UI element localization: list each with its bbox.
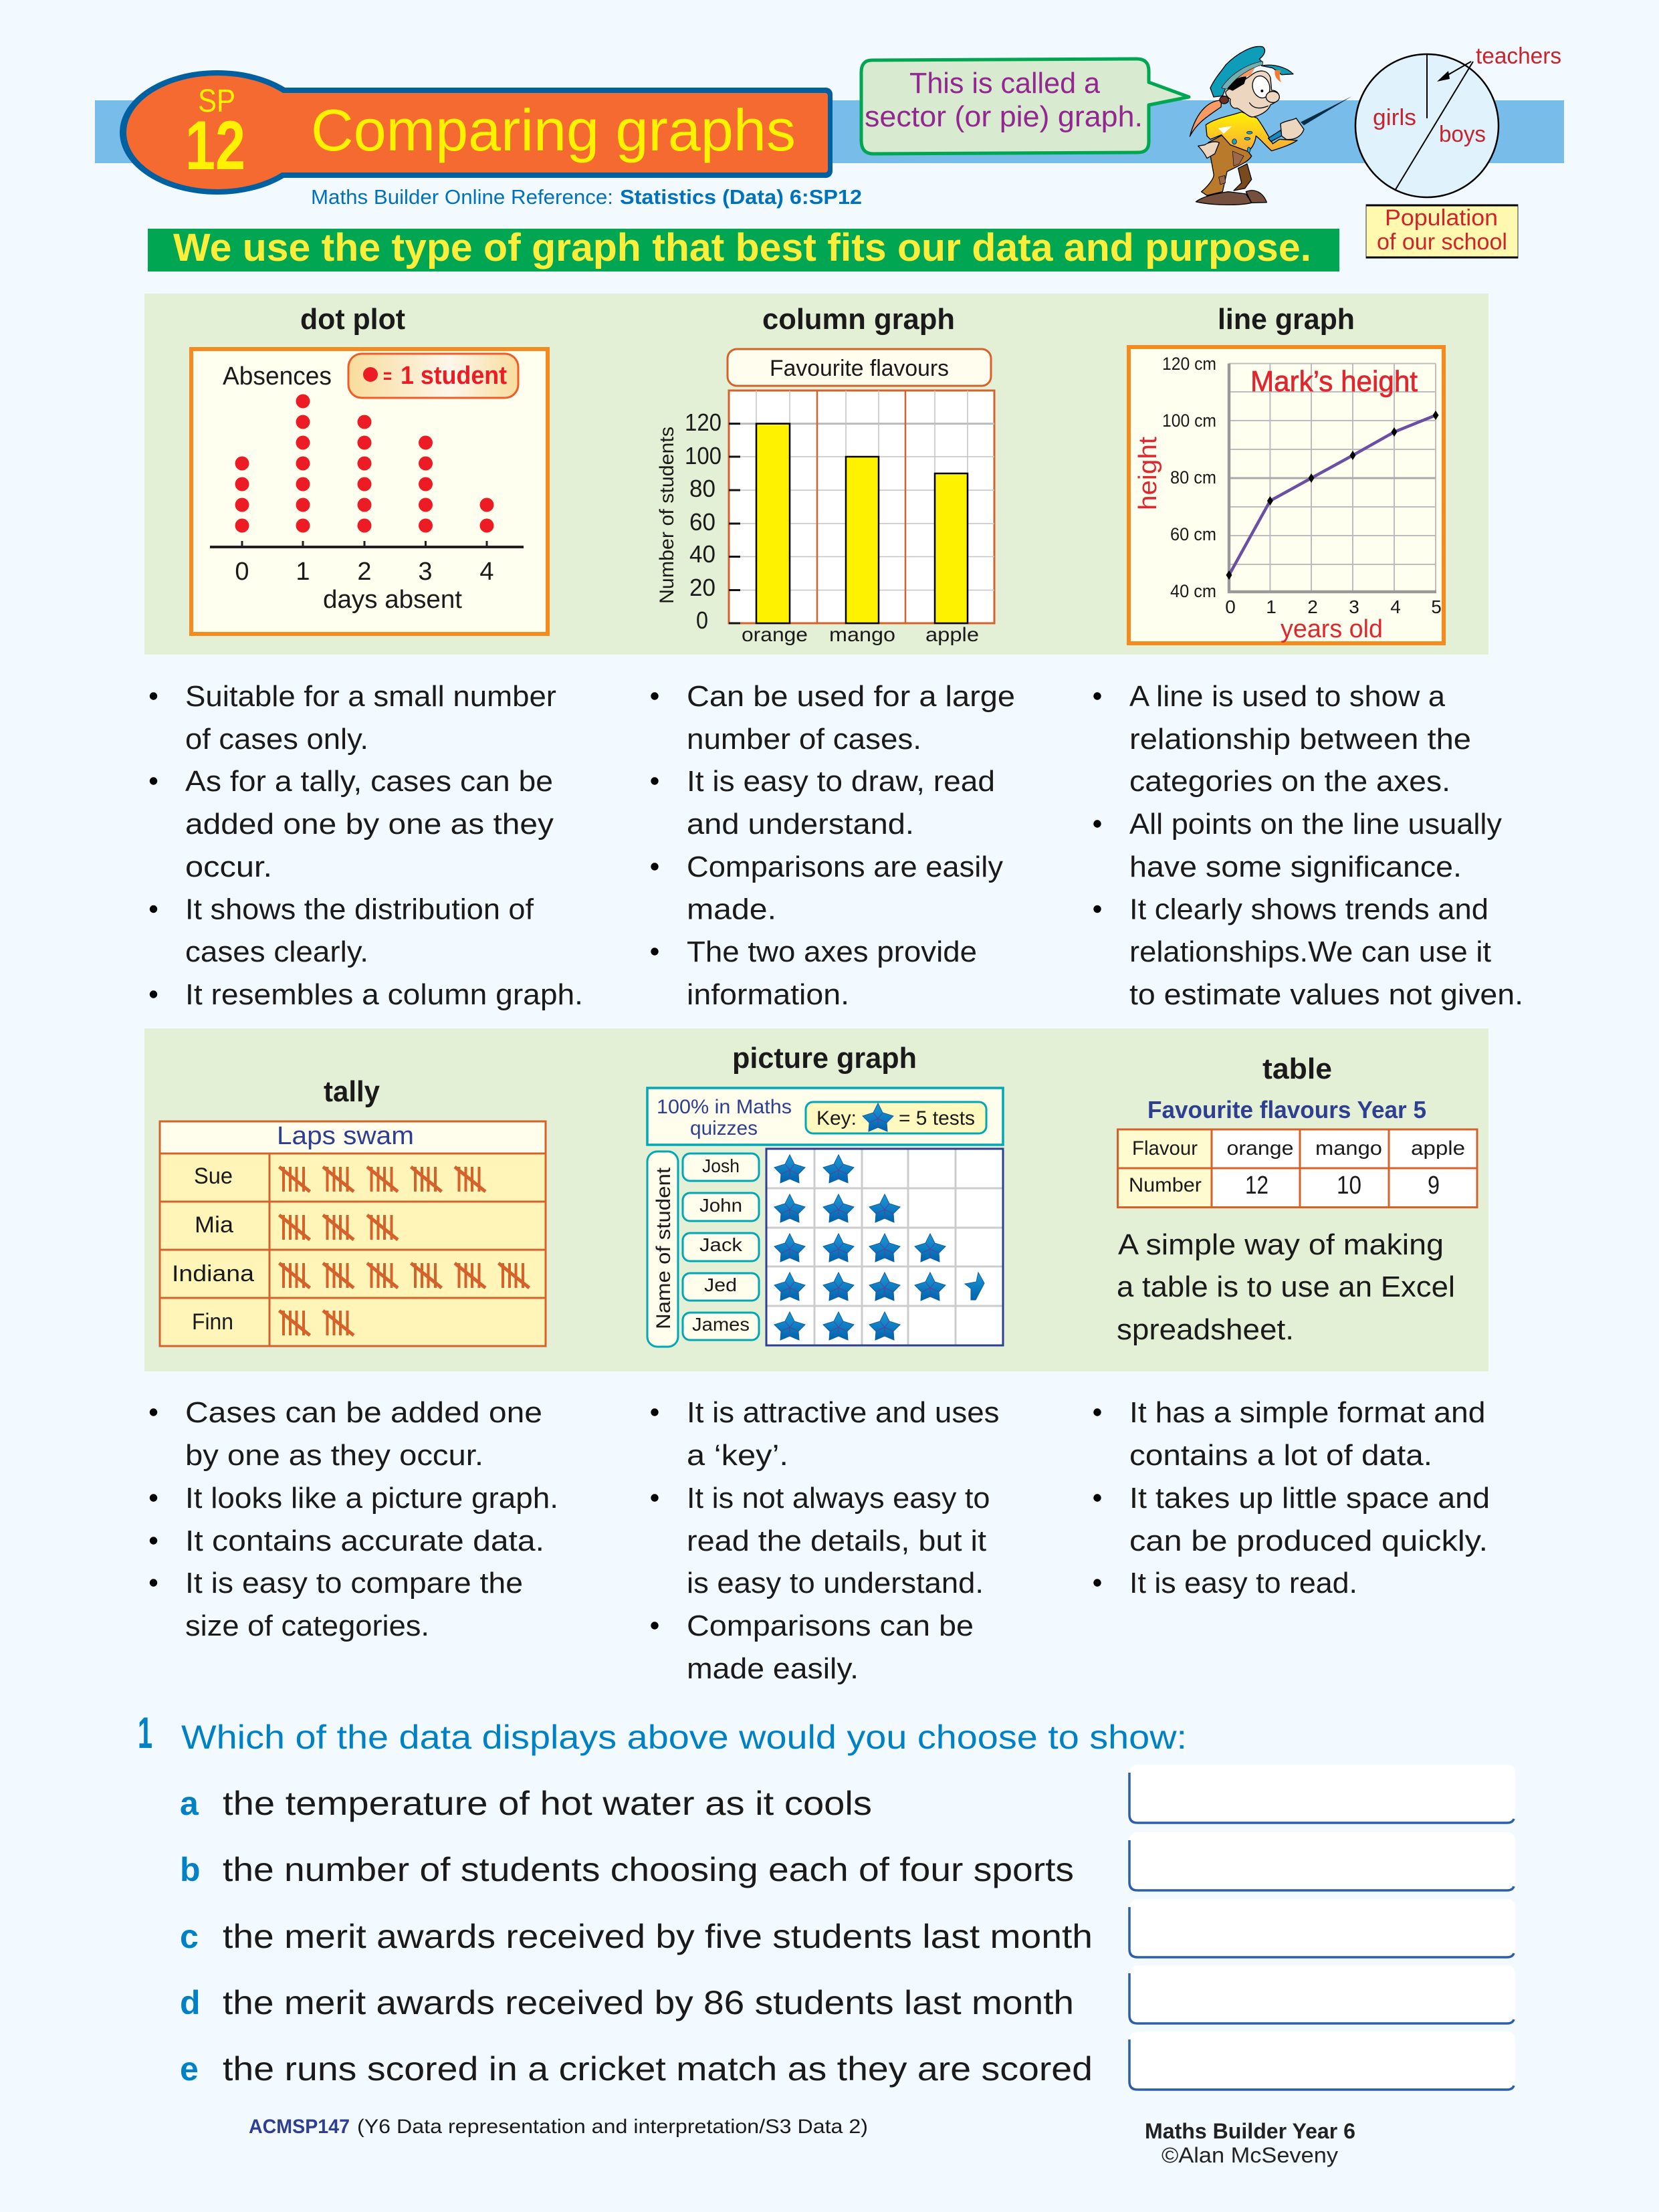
chart: dot plot [191,349,548,634]
chart: column graph: 80 [689,475,715,502]
text block: column graph notes [651,680,1015,1011]
text block: dot plot notes: added one by one as they [185,808,554,841]
question parts: a [180,1785,199,1822]
axis label pill: Name of student [653,1167,675,1329]
chart: line graph: 40 cm [1170,581,1216,601]
chart: picture graph: quizzes [690,1117,758,1139]
text block: dot plot notes: It resembles a column graph. [185,978,583,1011]
text block: tally notes [150,1396,558,1642]
chart: dot plot: 3 [418,558,433,586]
chart: column graph: 20 [689,574,715,601]
footer credit: Maths Builder Year 6 [1145,2119,1355,2143]
text block: tally notes: Cases can be added one [185,1396,542,1429]
teachers label and arrow [1437,43,1561,82]
chart: line graph: height [1134,437,1162,510]
chart: column graph: mango [829,624,895,646]
header banner strip [95,100,1564,163]
badge number 12: 12 [185,107,245,185]
chart: column graph: 120 [685,409,722,436]
question parts: the number of students choosing each of four sports [223,1851,1074,1888]
question heading [138,1708,1187,1757]
text block: column graph notes: It is easy to draw, read [687,765,995,798]
text block: picture graph notes: It is not always easy to [687,1482,990,1515]
star grid [766,1149,1003,1345]
dot plot key [348,354,518,398]
heading: tally: tally [324,1075,380,1108]
student name pills: Josh [702,1155,740,1176]
table section: Number [1129,1174,1202,1196]
panel: graph types row two [138,1028,1515,2167]
teachers label and arrow: teachers [1476,43,1561,69]
heading: picture graph: picture graph [732,1042,917,1075]
text block: picture graph notes: made easily. [687,1652,859,1685]
text block: picture graph notes: read the details, but it [687,1525,986,1557]
online reference line [311,185,862,209]
chart: line graph: 2 [1307,596,1318,617]
picture graph key [806,1102,986,1133]
dot plot key: 1 student [401,362,507,390]
dot plot key: = [383,365,392,387]
chart: line graph: 80 cm [1170,467,1216,487]
bars [756,424,968,623]
text block: dot plot notes: As for a tally, cases can be [185,765,553,798]
footer curriculum reference: ACMSP147 [249,2116,350,2138]
chart: line graph: 0 [1225,596,1236,617]
text block: column graph notes: made. [687,893,776,925]
text block: picture graph notes [651,1396,999,1685]
question parts [180,1785,1093,2088]
text block: dot plot notes: It shows the distribution of [185,893,534,925]
heading: line graph: line graph [1218,303,1355,336]
table section: 10 [1337,1172,1361,1200]
text block: line graph notes: categories on the axes. [1129,765,1450,798]
sector graph caption: of our school [1377,229,1507,255]
sector (pie) graph: girls [1373,105,1416,130]
tally marks [280,1167,530,1335]
footer credit: ©Alan McSeveny [1162,2143,1338,2167]
picture graph key: = 5 tests [899,1107,975,1129]
text block: column graph notes: and understand. [687,808,914,841]
table section: Flavour [1132,1137,1198,1159]
chart: line graph: 5 [1431,596,1442,617]
question parts: the merit awards received by five students last month [223,1918,1093,1955]
title text: Comparing graphs [311,97,796,163]
question parts: the runs scored in a cricket match as they are scored [223,2050,1093,2088]
chart: column graph [656,349,994,646]
text block: picture graph notes: a ‘key’. [687,1439,788,1472]
text block: line graph notes: It clearly shows trends and [1129,893,1488,925]
answer boxes [1129,1765,1515,2090]
sector graph caption: Population [1385,205,1498,231]
text block: table notes [1093,1396,1490,1599]
title badge [120,70,833,195]
chart: column graph: orange [742,624,808,646]
text block: table notes: can be produced quickly. [1129,1525,1488,1557]
axis label pill [647,1151,678,1347]
question parts: the merit awards received by 86 students last month [223,1984,1074,2021]
panel: graph types row one [144,294,1488,655]
student name pills: Jed [704,1275,737,1295]
chart: column graph: Number of students [656,427,678,604]
chart: line graph: 4 [1390,596,1401,617]
chart: tally table: Indiana [172,1261,254,1287]
heading: table: table [1262,1053,1332,1085]
text block: column graph notes: information. [687,978,849,1011]
chart: column graph: Favourite flavours [770,356,949,381]
table note: spreadsheet. [1117,1313,1294,1346]
question heading: Which of the data displays above would you choose to show: [181,1719,1187,1756]
text block: picture graph notes: is easy to understand. [687,1567,984,1599]
footer curriculum reference: (Y6 Data representation and interpretation/S3 Data 2) [357,2116,868,2138]
text block: line graph notes: relationship between the [1129,723,1471,756]
text block: line graph notes: All points on the line usually [1129,808,1502,841]
question parts: c [180,1918,199,1955]
student name pills [683,1153,759,1340]
chart: line graph: years old [1281,615,1383,643]
key statement banner: We use the type of graph that best fits our data and purpose. [173,226,1311,269]
question parts: b [180,1851,201,1888]
sector (pie) graph [1355,43,1561,197]
text block: dot plot notes: cases clearly. [185,935,368,968]
icon: cartoon character with pointer [1190,46,1352,205]
table section: mango [1315,1137,1382,1159]
text block: line graph notes: to estimate values not given. [1129,978,1523,1011]
text block: line graph notes: have some significance. [1129,851,1462,883]
student name pills: James [692,1314,750,1335]
chart: dot plot: Absences [223,362,332,391]
text block: column graph notes: number of cases. [687,723,921,756]
text block: column graph notes: Comparisons are easily [687,851,1003,883]
text block: tally notes: It contains accurate data. [185,1525,544,1557]
dots [235,395,493,532]
heading: column graph: column graph [762,303,955,336]
sector graph caption [1366,205,1518,258]
student name pills: John [699,1195,742,1216]
chart: dot plot: 4 [479,558,494,586]
text block: tally notes: size of categories. [185,1610,429,1642]
chart: column graph: 0 [696,606,708,634]
speech bubble: This is called a [909,67,1101,100]
text block: column graph notes: The two axes provide [687,935,977,968]
text block: dot plot notes: occur. [185,851,272,883]
text block: line graph notes [1093,680,1523,1011]
chart: picture graph [647,1088,1003,1347]
footer credit [1145,2119,1355,2167]
text block: table notes: contains a lot of data. [1129,1439,1432,1472]
text block: table notes: It has a simple format and [1129,1396,1486,1429]
text block: line graph notes: A line is used to show a [1129,680,1446,713]
student name pills: Jack [699,1234,743,1255]
chart: dot plot: 0 [235,558,249,586]
chart: line graph: 100 cm [1162,411,1216,431]
table section: 9 [1428,1172,1440,1200]
chart: line graph [1129,347,1444,643]
question parts: d [180,1984,201,2021]
text block: dot plot notes: of cases only. [185,723,368,756]
picture graph key: Key: [816,1107,857,1129]
chart: column graph: apple [925,624,979,646]
speech bubble [861,59,1189,154]
sector (pie) graph: boys [1439,122,1486,147]
table section [1117,1096,1477,1346]
text block: tally notes: by one as they occur. [185,1439,483,1472]
chart: dot plot: 2 [357,558,372,586]
table section: apple [1411,1137,1465,1159]
text block: tally notes: It is easy to compare the [185,1567,523,1599]
chart: tally table: Sue [194,1164,233,1189]
chart: line graph: 3 [1349,596,1359,617]
text block: table notes: It takes up little space and [1129,1482,1490,1515]
chart: line graph: 60 cm [1170,524,1216,544]
speech bubble: sector (or pie) graph. [865,100,1143,133]
question parts: e [180,2050,199,2088]
chart: tally table: Finn [192,1309,233,1335]
chart: tally table: Laps swam [277,1122,414,1150]
chart: line graph: 1 [1266,596,1277,617]
text block: dot plot notes: Suitable for a small number [185,680,556,713]
text block: picture graph notes: Comparisons can be [687,1610,974,1642]
chart: tally table: Mia [195,1212,233,1238]
table section: Favourite flavours Year 5 [1147,1096,1426,1123]
chart: line graph: Mark’s height [1250,365,1418,398]
table note: a table is to use an Excel [1117,1270,1455,1303]
text block: dot plot notes [150,680,583,1011]
text block: column graph notes: Can be used for a large [687,680,1015,713]
badge code SP: SP [198,84,235,119]
text block: line graph notes: relationships.We can use it [1129,935,1491,968]
chart: dot plot: days absent [323,586,462,614]
chart: picture graph: 100% in Maths [657,1096,792,1118]
chart: column graph: 40 [689,540,715,568]
text block: picture graph notes: It is attractive and uses [687,1396,999,1429]
heading: dot plot: dot plot [300,303,405,336]
chart: column graph: 60 [689,508,715,536]
chart: tally table [160,1121,546,1346]
chart: line graph: 120 cm [1162,354,1216,374]
online reference line: Maths Builder Online Reference: [311,185,613,209]
chart: column graph: 100 [685,442,722,469]
table note: A simple way of making [1118,1228,1444,1261]
question heading: 1 [138,1708,152,1757]
text block: tally notes: It looks like a picture graph. [185,1482,558,1515]
table section: 12 [1245,1172,1268,1200]
text block: table notes: It is easy to read. [1129,1567,1357,1599]
table note [1117,1228,1455,1346]
question parts: the temperature of hot water as it cools [223,1785,872,1822]
online reference line: Statistics (Data) 6:SP12 [620,185,862,209]
table section: orange [1226,1137,1293,1159]
chart: dot plot: 1 [296,558,310,586]
